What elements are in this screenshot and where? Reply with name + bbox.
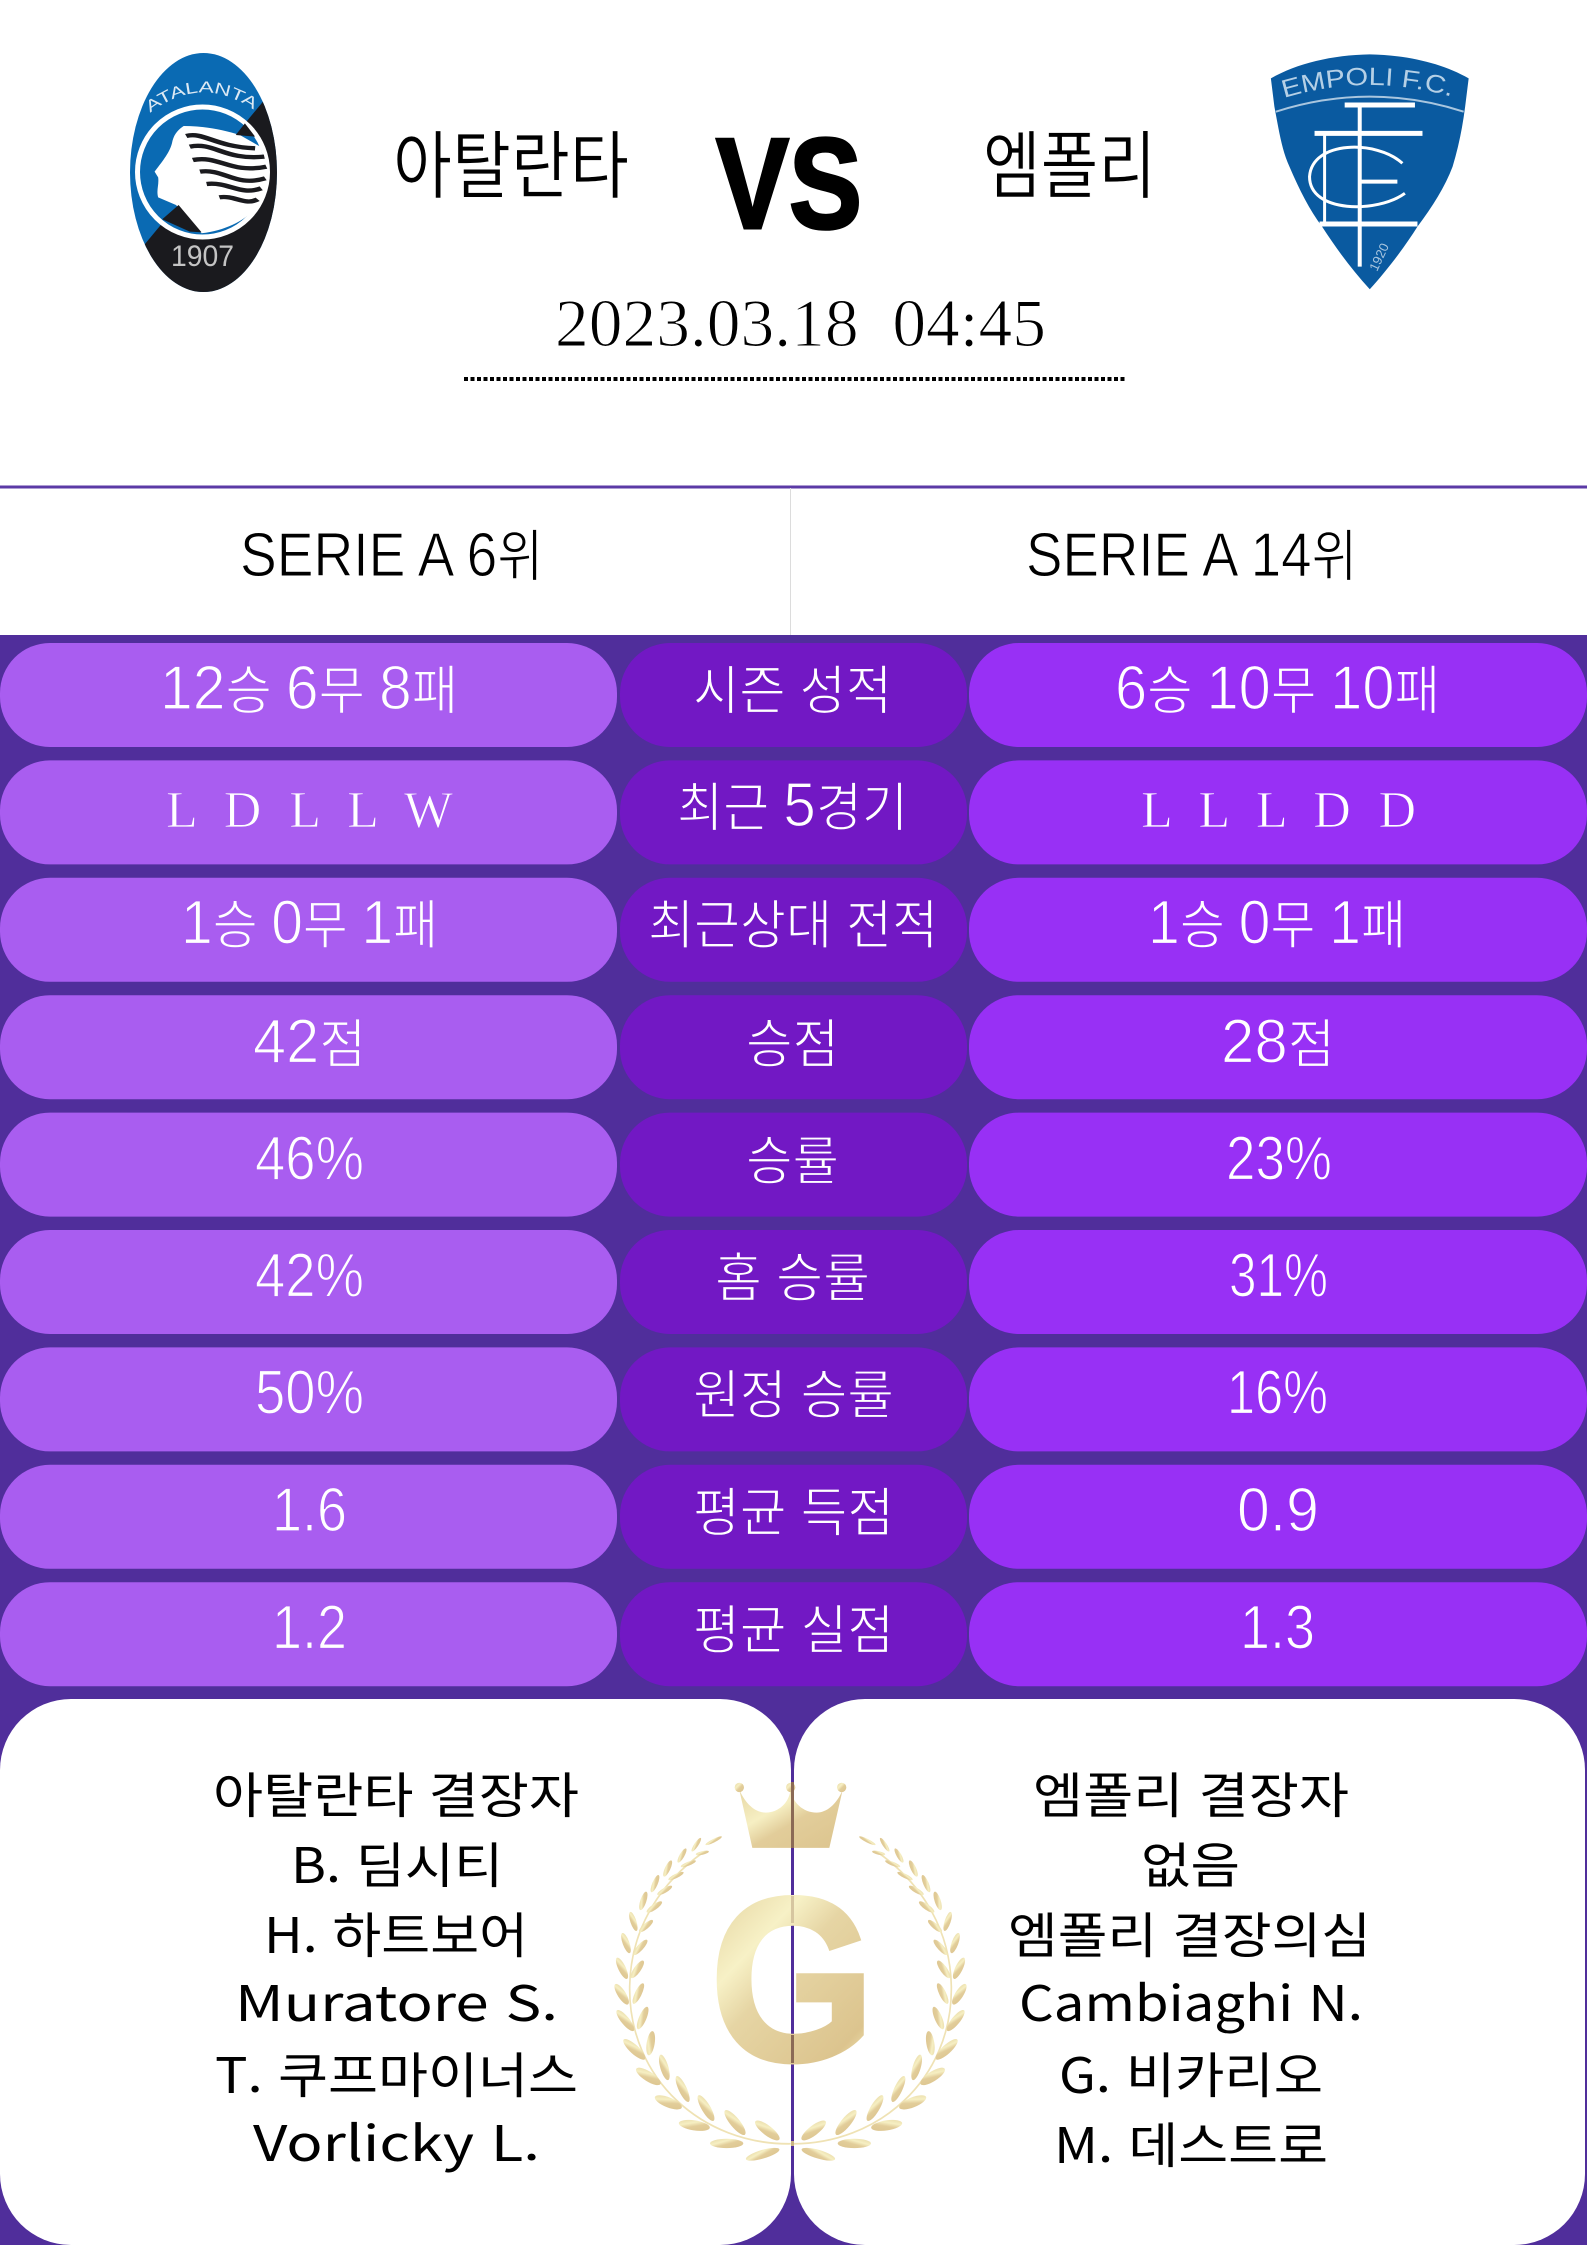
row: head to head: 1승 0무 1패 xyxy=(1148,884,1406,960)
emblem letter G: G xyxy=(710,1850,875,2110)
row: goals scored average: 1.6 xyxy=(272,1476,347,1545)
icon: Empoli crest: EMPOLI F.C. xyxy=(1282,68,1450,98)
match date: 2023.03.18 04:45 xyxy=(555,285,1046,361)
panel: Atalanta absences: H. 하트보어 xyxy=(264,1897,528,1968)
VS mark: VS xyxy=(716,112,862,256)
row: goals scored average: 0.9 xyxy=(1237,1476,1319,1545)
panel: Empoli absences: 엠폴리 결장의심 xyxy=(1008,1897,1371,1968)
panel: Empoli absences: G. 비카리오 xyxy=(1059,2037,1323,2108)
panel: Atalanta absences: Vorlicky L. xyxy=(253,2105,540,2176)
panel: Atalanta absences: B. 딤시티 xyxy=(291,1827,503,1898)
panel: Empoli absences xyxy=(794,1699,1585,2245)
icon: crown xyxy=(735,1783,846,1848)
purple background band xyxy=(0,635,1587,2245)
icon: Atalanta crest: ATALANTA xyxy=(149,82,254,113)
row: points: 28점 xyxy=(1221,1002,1335,1078)
row: home win rate: 31% xyxy=(1229,1242,1328,1310)
row: head to head: 최근상대 전적 xyxy=(648,884,938,960)
panel: Atalanta absences xyxy=(0,1699,791,2245)
row: away win rate: 50% xyxy=(255,1358,364,1428)
row: last five matches: L L L D D xyxy=(1141,782,1416,839)
row: season record: 6승 10무 10패 xyxy=(1115,649,1440,725)
row: points xyxy=(0,995,1587,1099)
panel: Empoli absences: Cambiaghi N. xyxy=(1019,1965,1363,2036)
row: win rate: 46% xyxy=(255,1124,364,1194)
row: points: 승점 xyxy=(746,1002,839,1078)
row: last five matches: 최근 5경기 xyxy=(677,766,908,842)
icon: Empoli crest: 1920 xyxy=(1366,241,1392,273)
header: match-up xyxy=(130,53,1469,361)
panel: comparison table xyxy=(0,643,1587,1686)
icon: Empoli crest xyxy=(1270,54,1469,290)
panel: Atalanta absences: Muratore S. xyxy=(235,1965,558,2036)
row: season record: 12승 6무 8패 xyxy=(160,649,458,725)
icon: Atalanta crest xyxy=(130,53,277,292)
row: win rate xyxy=(0,1113,1587,1217)
away team name: 엠폴리 xyxy=(983,107,1156,214)
row: season record: 시즌 성적 xyxy=(693,649,892,725)
row: last five matches: L D L L W xyxy=(166,782,453,839)
panel: Empoli absences: 없음 xyxy=(1141,1827,1240,1898)
row: home win rate: 홈 승률 xyxy=(715,1236,870,1312)
row: away win rate: 16% xyxy=(1227,1358,1328,1428)
icon: gold crown and laurel emblem xyxy=(612,1782,969,2163)
row: goals scored average xyxy=(0,1465,1587,1569)
row: season record xyxy=(0,643,1587,747)
row: home win rate xyxy=(0,1230,1587,1334)
row: away win rate xyxy=(0,1347,1587,1451)
row: last five matches xyxy=(0,760,1587,864)
row: head to head xyxy=(0,878,1587,982)
row: win rate: 승률 xyxy=(746,1120,839,1196)
panel: Empoli absences: M. 데스트로 xyxy=(1054,2107,1328,2178)
row: away win rate: 원정 승률 xyxy=(693,1354,894,1430)
panel: Empoli absences: 엠폴리 결장자 xyxy=(1033,1757,1349,1828)
row: goals conceded average: 1.2 xyxy=(272,1594,347,1662)
row: goals conceded average: 평균 실점 xyxy=(693,1588,894,1664)
home team name: 아탈란타 xyxy=(393,107,629,214)
home league position: SERIE A 6위 xyxy=(240,512,543,593)
row: goals conceded average: 1.3 xyxy=(1240,1594,1315,1662)
row: points: 42점 xyxy=(253,1002,366,1078)
panel: Atalanta absences: T. 쿠프마이너스 xyxy=(215,2037,578,2108)
row: home win rate: 42% xyxy=(255,1242,364,1310)
league standing bar xyxy=(240,512,1357,593)
panel: Atalanta absences: 아탈란타 결장자 xyxy=(213,1757,579,1828)
row: head to head: 1승 0무 1패 xyxy=(181,884,438,960)
icon: Atalanta crest: 1907 xyxy=(171,240,234,273)
away league position: SERIE A 14위 xyxy=(1026,512,1357,593)
row: goals conceded average xyxy=(0,1582,1587,1686)
row: win rate: 23% xyxy=(1226,1124,1332,1194)
icon: laurel wreath xyxy=(612,1835,969,2163)
row: goals scored average: 평균 득점 xyxy=(693,1471,894,1547)
